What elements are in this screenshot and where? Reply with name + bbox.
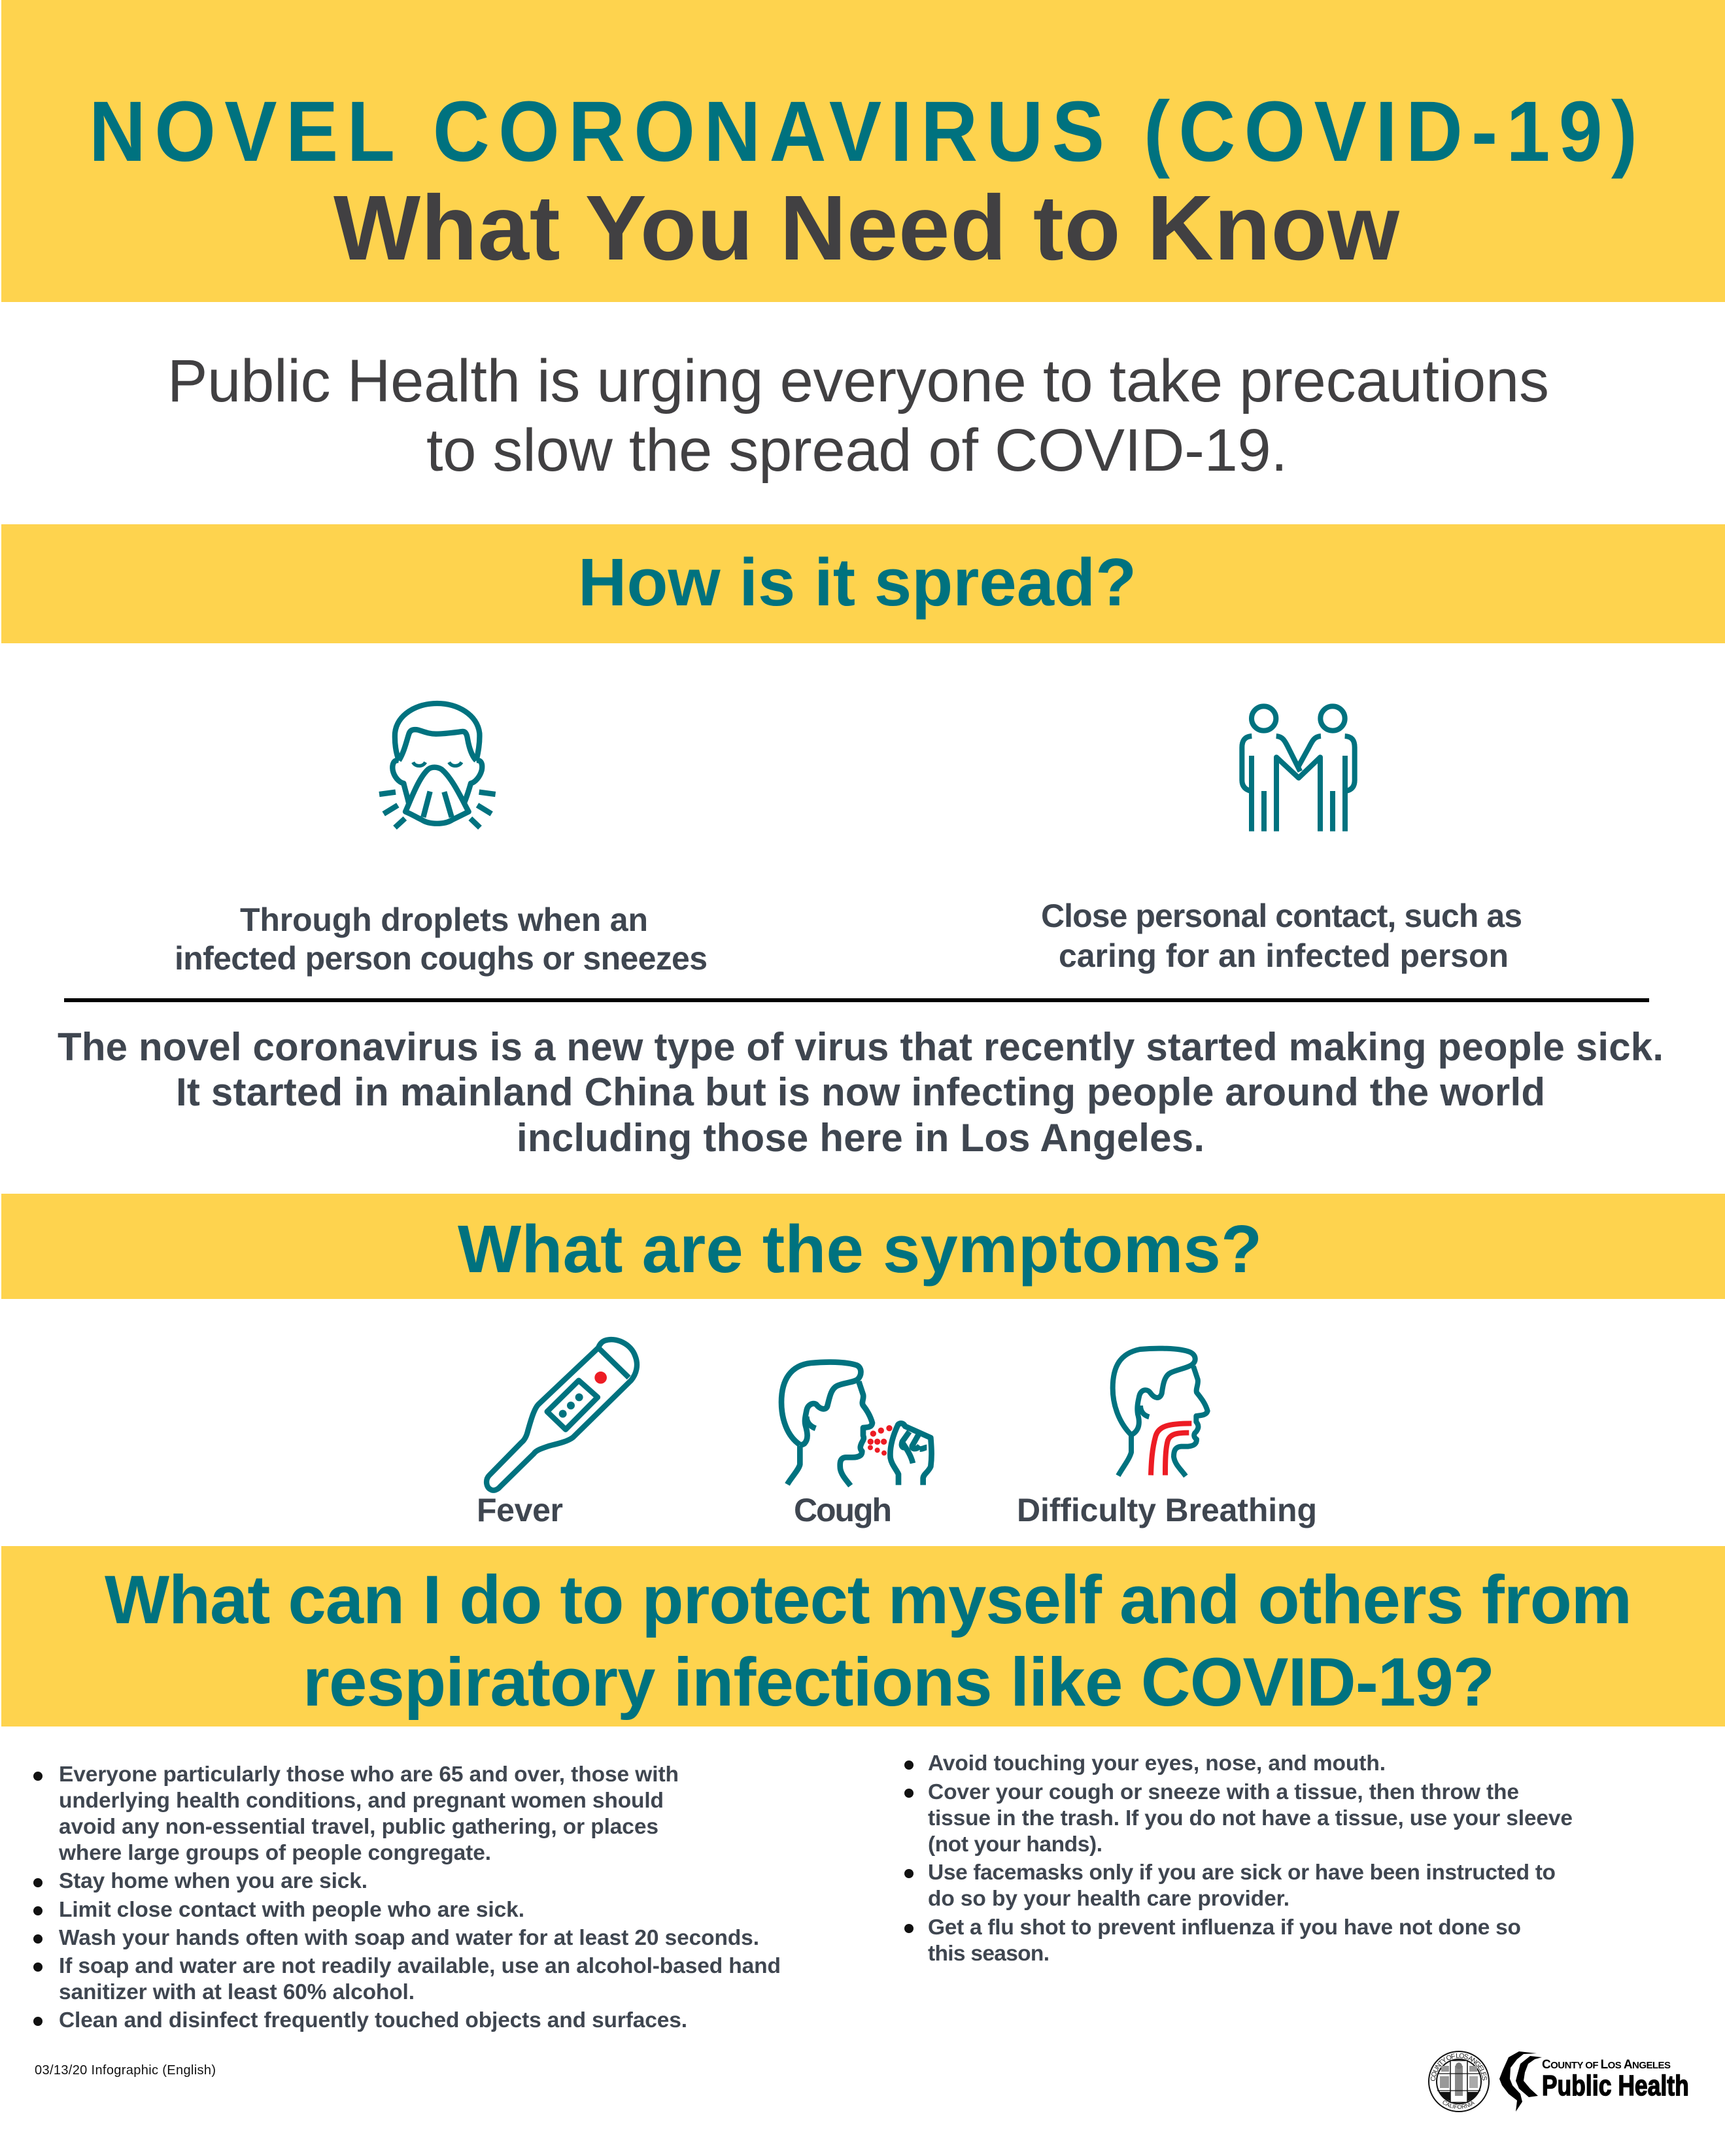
list: right bullets: Avoid touching your eyes, nose, and mouth. — [928, 1751, 1386, 1776]
list: left bullets: Limit close contact with people who are sick. — [59, 1898, 524, 1922]
list: right bullets: Use facemasks only if you are sick or have been instructed to — [928, 1861, 1556, 1885]
label: difficulty breathing: Difficulty Breathing — [1017, 1492, 1317, 1528]
section band: how is it spread — [1, 524, 1725, 643]
caption: close contact: Close personal contact, such as — [1041, 898, 1522, 934]
list: right bullets: this season. — [928, 1942, 1050, 1966]
caption: droplets — [175, 901, 708, 977]
logo: county seal: COUNTY OF LOS ANGELES — [1431, 2053, 1487, 2081]
paragraph: about the virus: The novel coronavirus is a new type of virus that recently started making people sick. — [58, 1025, 1664, 1069]
section band: symptoms: What are the symptoms? — [458, 1211, 1262, 1287]
list: left bullets: sanitizer with at least 60% alcohol. — [59, 1980, 415, 2004]
caption: close contact — [1041, 898, 1522, 974]
list: left bullets: Clean and disinfect frequently touched objects and surfaces. — [59, 2008, 687, 2032]
label: cough: Cough — [794, 1492, 892, 1528]
title: novel coronavirus: NOVEL CORONAVIRUS (COVID-19) — [89, 83, 1637, 179]
list: right bullets: tissue in the trash. If you do not have a tissue, use your sleeve — [928, 1806, 1573, 1830]
paragraph: about the virus: It started in mainland China but is now infecting people around the world — [176, 1070, 1545, 1114]
icon: person with difficulty breathing — [1113, 1349, 1208, 1476]
icon: person sneezing with mask — [379, 703, 496, 828]
logo: public health: COUNTY OF LOS ANGELES — [1542, 2058, 1671, 2072]
section band: symptoms — [1, 1194, 1725, 1299]
logo: public health — [1499, 2051, 1689, 2112]
caption: close contact: caring for an infected person — [1059, 937, 1509, 974]
icon: person coughing — [781, 1362, 932, 1486]
list: left bullets: If soap and water are not readily available, use an alcohol-based hand — [59, 1954, 781, 1978]
logo: public health: Public Health — [1542, 2070, 1689, 2102]
list: left bullets: where large groups of people congregate. — [58, 1841, 491, 1865]
intro text: to slow the spread of COVID-19. — [426, 417, 1288, 484]
label: fever: Fever — [477, 1492, 563, 1528]
logo: county seal — [1428, 2051, 1490, 2112]
caption: droplets: infected person coughs or sneezes — [175, 940, 708, 977]
intro text — [167, 348, 1549, 484]
logo: county seal: CALIFORNIA — [1443, 2100, 1475, 2109]
section band: protect — [1, 1546, 1725, 1726]
list: right bullets: Get a flu shot to prevent influenza if you have not done so — [928, 1915, 1521, 1940]
list: left bullets: Everyone particularly those who are 65 and over, those with — [59, 1762, 679, 1787]
list: right bullets — [904, 1751, 1573, 1966]
paragraph: about the virus — [58, 1025, 1664, 1160]
intro text: Public Health is urging everyone to take precautions — [167, 348, 1549, 414]
caption: droplets: Through droplets when an — [240, 901, 648, 938]
list: right bullets: (not your hands). — [928, 1832, 1102, 1857]
icon: thermometer — [487, 1339, 637, 1491]
title: what you need to know: What You Need to Know — [333, 176, 1399, 279]
icon: two people holding hands — [1242, 706, 1355, 832]
paragraph: about the virus: including those here in Los Angeles. — [517, 1116, 1204, 1160]
section band: protect: What can I do to protect myself and others from — [105, 1562, 1632, 1638]
list: left bullets: avoid any non-essential travel, public gathering, or places — [59, 1815, 658, 1839]
list: right bullets: do so by your health care provider. — [928, 1887, 1289, 1911]
list: left bullets: underlying health conditions, and pregnant women should — [59, 1789, 664, 1813]
section band: protect: respiratory infections like COVID-19? — [303, 1644, 1495, 1721]
list: right bullets: Cover your cough or sneeze with a tissue, then throw the — [928, 1780, 1519, 1804]
list: left bullets: Stay home when you are sick. — [59, 1869, 367, 1893]
footer date note: 03/13/20 Infographic (English) — [35, 2063, 216, 2078]
list: left bullets — [33, 1762, 781, 2032]
list: left bullets: Wash your hands often with soap and water for at least 20 seconds. — [59, 1926, 759, 1950]
header band — [1, 0, 1725, 302]
section band: how is it spread: How is it spread? — [578, 545, 1136, 620]
